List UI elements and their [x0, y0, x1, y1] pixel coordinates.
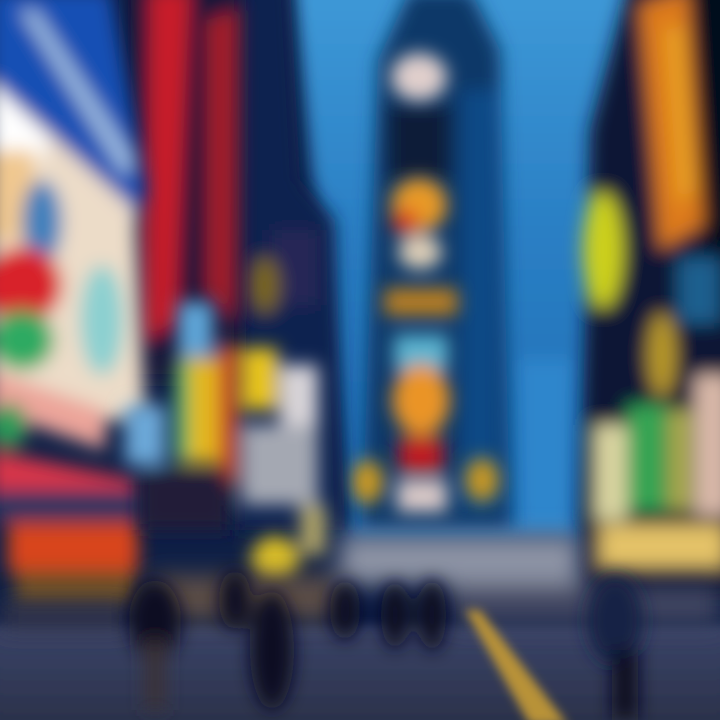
- pedestrians: [129, 570, 643, 720]
- road line: [465, 610, 568, 720]
- central tower signs: [350, 53, 499, 512]
- left blue building dark mid: [235, 0, 345, 530]
- centre left signs: [125, 302, 326, 584]
- right buildings: [578, 0, 720, 600]
- street: [0, 625, 720, 720]
- left billboards: [0, 0, 145, 605]
- storefront band: [0, 535, 720, 630]
- sky: [290, 0, 640, 540]
- red columns: [125, 0, 240, 380]
- central tower: [362, 0, 510, 530]
